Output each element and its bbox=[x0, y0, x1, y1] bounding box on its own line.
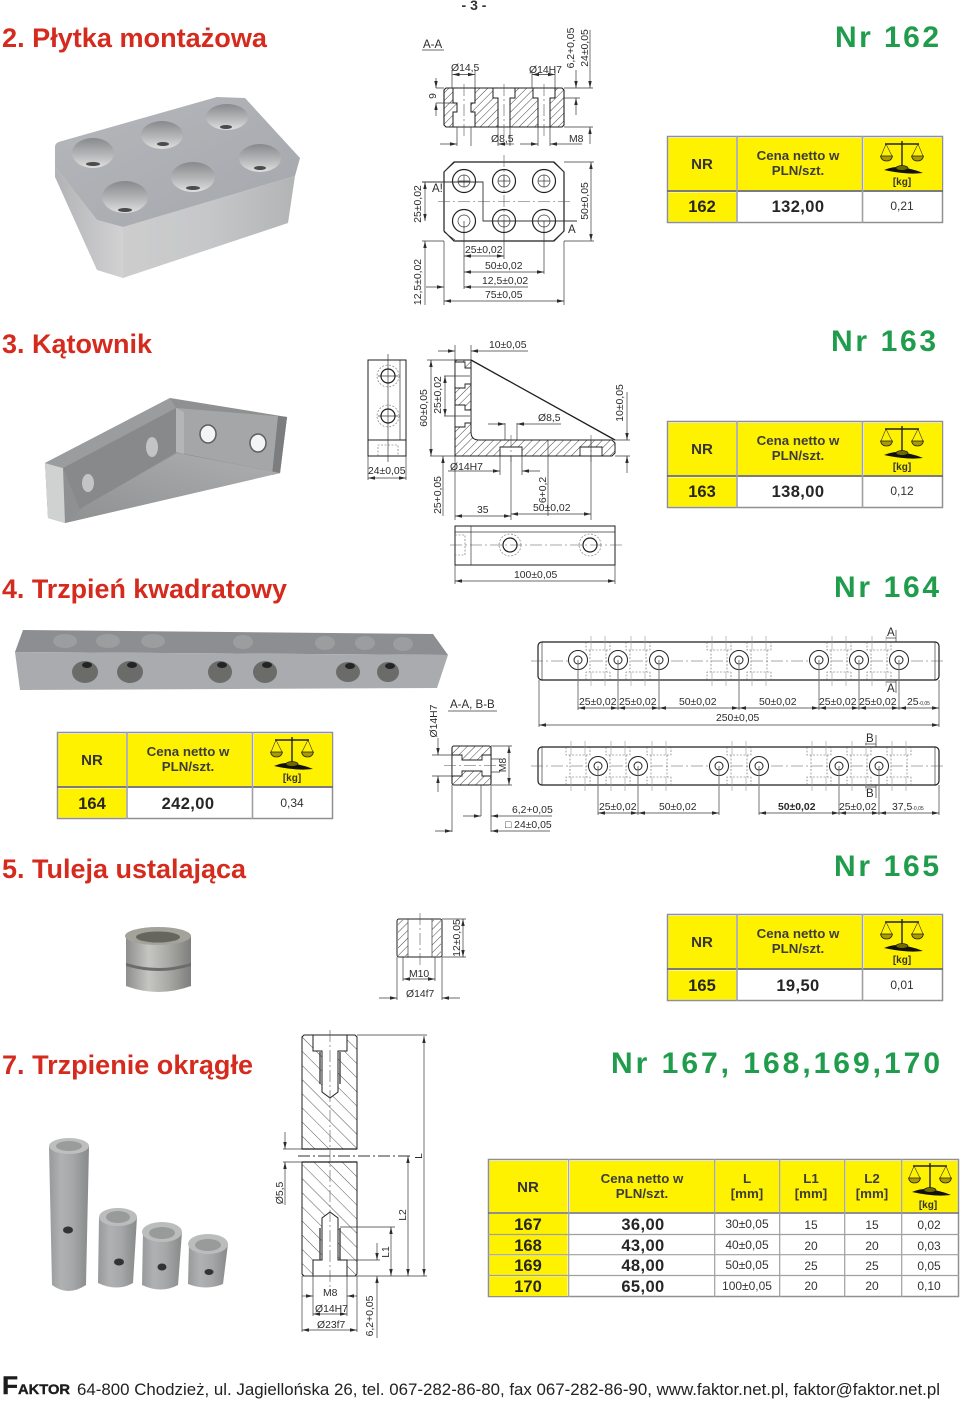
header labels bbox=[517, 1163, 952, 1211]
L section dimensions: 25±0,02 bbox=[433, 376, 444, 414]
heading: section 5: 5. Tuleja ustalająca bbox=[2, 854, 247, 884]
price table 162 bbox=[667, 136, 943, 223]
bottom bar dimensions: 25±0,02 bbox=[839, 802, 877, 813]
header labels: L2 bbox=[864, 1171, 880, 1186]
price table 163: PLN/szt. bbox=[772, 448, 824, 463]
row 169: 0,05 bbox=[917, 1259, 941, 1273]
row 168: 40±0,05 bbox=[725, 1238, 769, 1252]
header cells bbox=[490, 1161, 958, 1296]
L section dimensions: 35 bbox=[477, 505, 489, 516]
top bar dimensions: 25±0,02 bbox=[819, 697, 857, 708]
top bar dimensions: 25±0,02 bbox=[619, 697, 657, 708]
L section dimensions: Ø14H7 bbox=[450, 462, 483, 473]
row 167: 30±0,05 bbox=[725, 1217, 769, 1231]
row 170 bbox=[514, 1278, 941, 1296]
row 168: 0,03 bbox=[917, 1239, 941, 1253]
section A-A, B-B: 6,2+0,05 bbox=[512, 805, 553, 816]
pin dimensions: L bbox=[414, 1153, 425, 1159]
photo: round pins bbox=[49, 1138, 228, 1291]
price table 164: 242,00 bbox=[162, 795, 214, 813]
row 169: 48,00 bbox=[621, 1257, 665, 1275]
L section dimensions: 10±0,05 bbox=[489, 340, 527, 351]
price table 164: 0,34 bbox=[280, 796, 304, 810]
pin section bbox=[298, 1030, 410, 1288]
price table 163: 138,00 bbox=[772, 483, 824, 501]
pin dimensions: L2 bbox=[398, 1209, 409, 1221]
top bar view bbox=[531, 636, 946, 686]
pin 3 bbox=[142, 1222, 182, 1290]
photo: locating sleeve bbox=[125, 927, 191, 992]
pin dimensions: Ø14H7 bbox=[315, 1304, 348, 1315]
bottom bar dimensions: 25±0,02 bbox=[599, 802, 637, 813]
product number 163: Nr 163 bbox=[831, 325, 936, 358]
price table 163: 0,12 bbox=[890, 484, 914, 498]
plan view bbox=[422, 155, 577, 241]
row 167 bbox=[514, 1216, 941, 1234]
footer contact line: 64-800 Chodzież, ul. Jagiellońska 26, tel. 067-282-86-80, fax 067-282-86-90, www.faktor.net.pl, faktor@faktor.net.pl bbox=[77, 1381, 940, 1399]
price table 163: 163 bbox=[688, 483, 716, 501]
section A-A, B-B: □ 24±0,05 bbox=[505, 820, 552, 831]
header labels: PLN/szt. bbox=[616, 1186, 668, 1201]
technical drawing: locating sleeve bbox=[379, 913, 466, 1000]
section dimensions: 6,2+0,05 bbox=[566, 27, 577, 68]
price table 163: Cena netto w bbox=[757, 433, 840, 448]
price table 164 bbox=[57, 732, 333, 819]
top bar dimensions: 250±0,05 bbox=[716, 713, 759, 724]
heading: section 2: 2. Płytka montażowa bbox=[2, 23, 268, 53]
heading: section 4: 4. Trzpień kwadratowy bbox=[2, 574, 287, 604]
row 168: 168 bbox=[514, 1237, 542, 1255]
plan dimensions: A! bbox=[432, 183, 443, 195]
price table 162: Cena netto w bbox=[757, 148, 840, 163]
bottom bar view bbox=[531, 741, 946, 791]
top bar dimensions: 50±0,02 bbox=[759, 697, 797, 708]
photo: angle bracket bbox=[45, 398, 287, 523]
price table 163: NR bbox=[691, 441, 713, 458]
section dimensions bbox=[428, 27, 593, 146]
row 167: 167 bbox=[514, 1216, 542, 1234]
pin dimensions: 6,2+0,05 bbox=[365, 1295, 376, 1336]
section A-A, B-B: M8 bbox=[498, 758, 509, 772]
row 167: 15 bbox=[865, 1218, 879, 1232]
pin dimensions: Ø5,5 bbox=[275, 1182, 286, 1204]
row 170: 65,00 bbox=[621, 1278, 665, 1296]
header labels: [mm] bbox=[795, 1186, 827, 1201]
bottom bar dimensions: 37,5-0,05 bbox=[892, 802, 924, 813]
header labels: [mm] bbox=[731, 1186, 763, 1201]
row 169: 169 bbox=[514, 1257, 542, 1275]
section label A-A: A-A bbox=[423, 39, 442, 51]
product number 165: Nr 165 bbox=[834, 850, 939, 883]
row 168: 43,00 bbox=[621, 1237, 665, 1255]
top bar dimensions: 25±0,02 bbox=[579, 697, 617, 708]
row 169: 25 bbox=[804, 1259, 818, 1273]
end view: 24±0,05 bbox=[368, 466, 406, 477]
row 167: 0,02 bbox=[917, 1218, 941, 1232]
plan dimensions: 25±0,02 bbox=[465, 245, 503, 256]
row 167: 36,00 bbox=[621, 1216, 665, 1234]
section dimensions: Ø8,5 bbox=[491, 134, 514, 145]
price table 163: [kg] bbox=[893, 462, 911, 473]
price table 165: PLN/szt. bbox=[772, 941, 824, 956]
pin dimensions: L1 bbox=[381, 1246, 392, 1258]
price table 162: PLN/szt. bbox=[772, 163, 824, 178]
price table 162: 132,00 bbox=[772, 198, 824, 216]
plan dimensions: 50±0,02 bbox=[485, 261, 523, 272]
row 168: 20 bbox=[804, 1239, 818, 1253]
price table 164: [kg] bbox=[283, 773, 301, 784]
technical drawing: square bar bbox=[429, 627, 946, 832]
L section dimensions: 6+0,2 bbox=[538, 477, 549, 503]
row 169: 25 bbox=[865, 1259, 879, 1273]
technical drawing: mounting plate bbox=[413, 27, 594, 305]
section A-A, B-B: A-A, B-B bbox=[450, 699, 495, 711]
heading: section 7: 7. Trzpienie okrągłe bbox=[2, 1050, 253, 1080]
row 170: 20 bbox=[804, 1279, 818, 1293]
price table 164: 164 bbox=[78, 795, 107, 813]
row 170: 170 bbox=[514, 1278, 542, 1296]
plan dimensions: 12,5±0,02 bbox=[413, 259, 424, 305]
price table 165: 0,01 bbox=[890, 978, 914, 992]
L section dimensions: Ø8,5 bbox=[538, 413, 561, 424]
top bar dimensions: 25-0,05 bbox=[907, 697, 930, 708]
bottom bar dimensions: B bbox=[866, 788, 874, 800]
pin 4 bbox=[188, 1234, 228, 1288]
price table 165: Cena netto w bbox=[757, 926, 840, 941]
bottom bar dimensions: B bbox=[866, 733, 874, 745]
table grid bbox=[488, 1159, 959, 1297]
price table 162: NR bbox=[691, 156, 713, 173]
header labels: [kg] bbox=[919, 1200, 937, 1211]
row 167: 15 bbox=[804, 1218, 818, 1232]
product number 164: Nr 164 bbox=[834, 571, 939, 604]
pin dimensions: Ø23f7 bbox=[317, 1320, 346, 1331]
price table 165: 165 bbox=[688, 977, 716, 995]
photo: mounting plate bbox=[55, 97, 300, 278]
header labels: NR bbox=[517, 1179, 539, 1196]
top bar dimensions: 50±0,02 bbox=[679, 697, 717, 708]
plan dimensions: 12,5±0,02 bbox=[482, 276, 528, 287]
plan dimensions: 75±0,05 bbox=[485, 290, 523, 301]
bottom bar dimensions: 50±0,02 bbox=[659, 802, 697, 813]
header labels: [mm] bbox=[856, 1186, 888, 1201]
header labels: L1 bbox=[803, 1171, 819, 1186]
price table 164: PLN/szt. bbox=[162, 759, 214, 774]
bottom view bbox=[450, 526, 622, 584]
L section dimensions: 50±0,02 bbox=[533, 503, 571, 514]
L section dimensions: 25+0,05 bbox=[433, 476, 444, 514]
top bar dimensions: 25±0,02 bbox=[859, 697, 897, 708]
plan dimensions: 50±0,05 bbox=[580, 182, 591, 220]
row 170: 100±0,05 bbox=[722, 1279, 772, 1293]
header labels: L bbox=[743, 1171, 751, 1186]
price table 164: NR bbox=[81, 752, 103, 769]
price table 162: 162 bbox=[688, 198, 716, 216]
bottom bar dimensions bbox=[598, 733, 939, 815]
section A-A, B-B: Ø14H7 bbox=[429, 704, 440, 737]
price table 165: [kg] bbox=[893, 955, 911, 966]
row 170: 0,10 bbox=[917, 1279, 941, 1293]
L section dimensions bbox=[419, 340, 630, 520]
row 168 bbox=[514, 1237, 941, 1255]
technical drawing: angle bracket bbox=[368, 340, 630, 584]
L section dimensions: 10±0,05 bbox=[615, 384, 626, 422]
price table 162: [kg] bbox=[893, 177, 911, 188]
section dimensions: M8 bbox=[569, 134, 584, 145]
L section bbox=[455, 360, 615, 462]
product number 162: Nr 162 bbox=[835, 21, 939, 54]
price table 165: NR bbox=[691, 934, 713, 951]
pin 2 bbox=[98, 1208, 137, 1288]
pin dimensions bbox=[275, 1035, 427, 1338]
price table 167-170 bbox=[488, 1159, 959, 1297]
pin dimensions: M8 bbox=[323, 1288, 338, 1299]
price table 162: 0,21 bbox=[890, 199, 914, 213]
photo: square bar bbox=[15, 630, 448, 690]
price table 165 bbox=[667, 914, 943, 1001]
technical drawing: locating sleeve: Ø14f7 bbox=[406, 989, 435, 1000]
top bar dimensions bbox=[539, 627, 939, 727]
top bar dimensions: A bbox=[887, 627, 895, 639]
section dimensions: Ø14H7 bbox=[529, 65, 562, 76]
price table 164: Cena netto w bbox=[147, 744, 230, 759]
footer logo: FAKTOR bbox=[2, 1372, 70, 1400]
row 170: 20 bbox=[865, 1279, 879, 1293]
row 168: 20 bbox=[865, 1239, 879, 1253]
technical drawing: round pin bbox=[275, 1030, 427, 1338]
end view bbox=[368, 354, 406, 480]
section dimensions: 9 bbox=[428, 93, 439, 99]
technical drawing: locating sleeve: 12±0,05 bbox=[452, 919, 463, 957]
section A-A, B-B bbox=[429, 699, 553, 832]
row 169 bbox=[514, 1257, 941, 1275]
technical drawing: locating sleeve: M10 bbox=[409, 969, 429, 980]
price table 163 bbox=[667, 421, 943, 508]
plan dimensions bbox=[413, 162, 594, 305]
row 169: 50±0,05 bbox=[725, 1258, 769, 1272]
plan dimensions: A bbox=[568, 224, 576, 236]
header labels: Cena netto w bbox=[601, 1171, 684, 1186]
product numbers 167-170: Nr 167, 168,169,170 bbox=[611, 1047, 940, 1080]
plan dimensions: 25±0,02 bbox=[413, 185, 424, 223]
section dimensions: 24±0,05 bbox=[580, 29, 591, 67]
bottom view: 100±0,05 bbox=[514, 570, 557, 581]
top bar dimensions: A bbox=[887, 683, 895, 695]
bottom bar dimensions: 50±0,02 bbox=[778, 802, 816, 813]
price table 165: 19,50 bbox=[776, 977, 820, 995]
long pin bbox=[49, 1138, 89, 1291]
heading: section 3: 3. Kątownik bbox=[2, 329, 153, 359]
section dimensions: Ø14,5 bbox=[451, 63, 480, 74]
section view A-A bbox=[444, 84, 564, 136]
L section dimensions: 60±0,05 bbox=[419, 389, 430, 427]
